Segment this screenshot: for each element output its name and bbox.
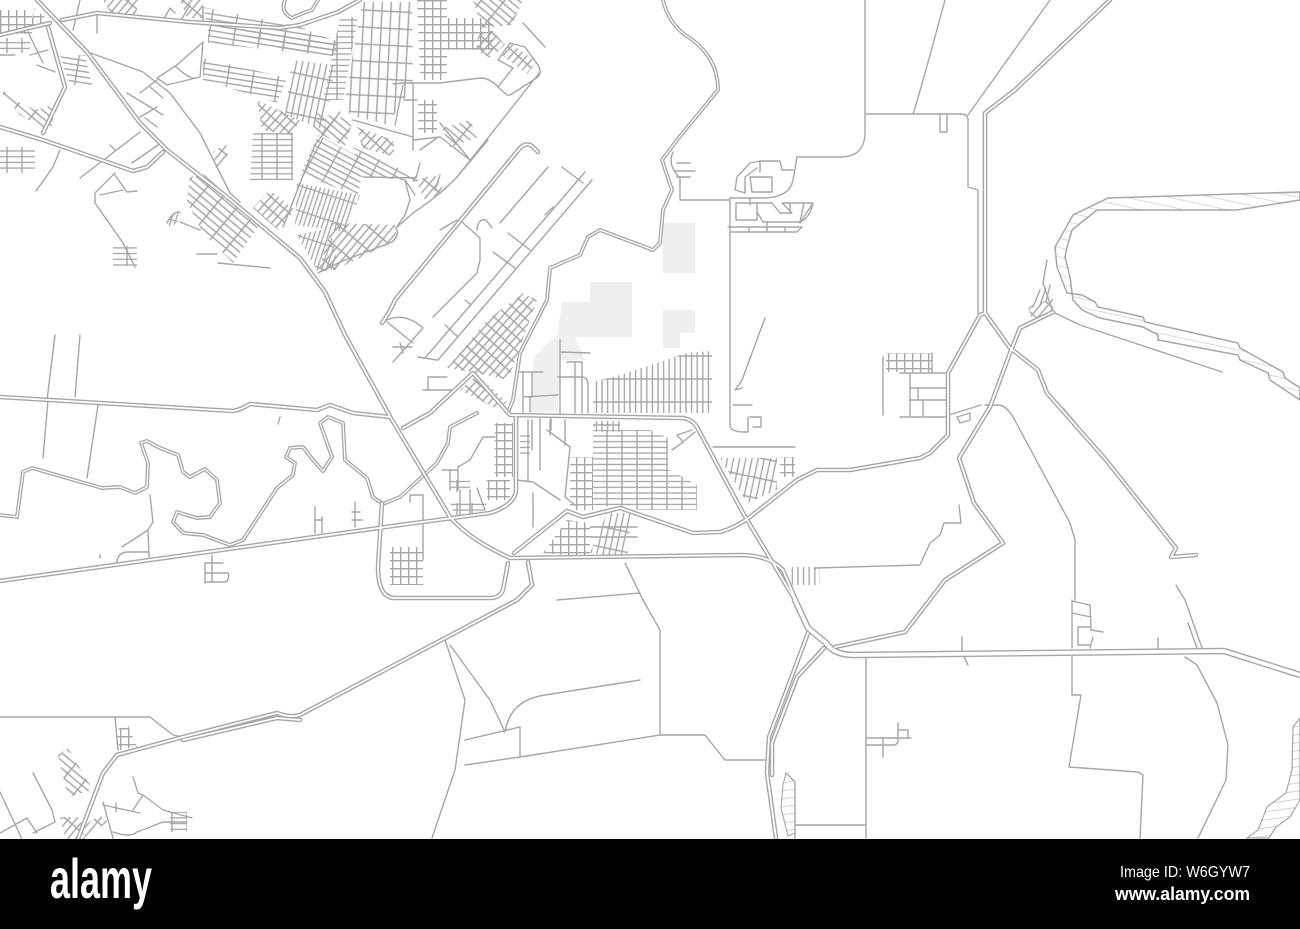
logo: alamy bbox=[50, 847, 152, 910]
river: south inlet bbox=[781, 773, 795, 836]
image id: Image ID: W6GYW7 bbox=[1120, 864, 1250, 881]
river: east bend bbox=[1055, 192, 1300, 400]
stippled built-up areas bbox=[530, 223, 695, 412]
website: www.alamy.com bbox=[1114, 884, 1250, 904]
street grids: airport town and central city bbox=[58, 293, 1053, 839]
footer bar bbox=[0, 839, 1300, 929]
street grids: north-west city bbox=[0, 0, 537, 272]
river: north-central and west meander bbox=[0, 0, 718, 545]
river: south-east corner bbox=[1247, 718, 1300, 838]
